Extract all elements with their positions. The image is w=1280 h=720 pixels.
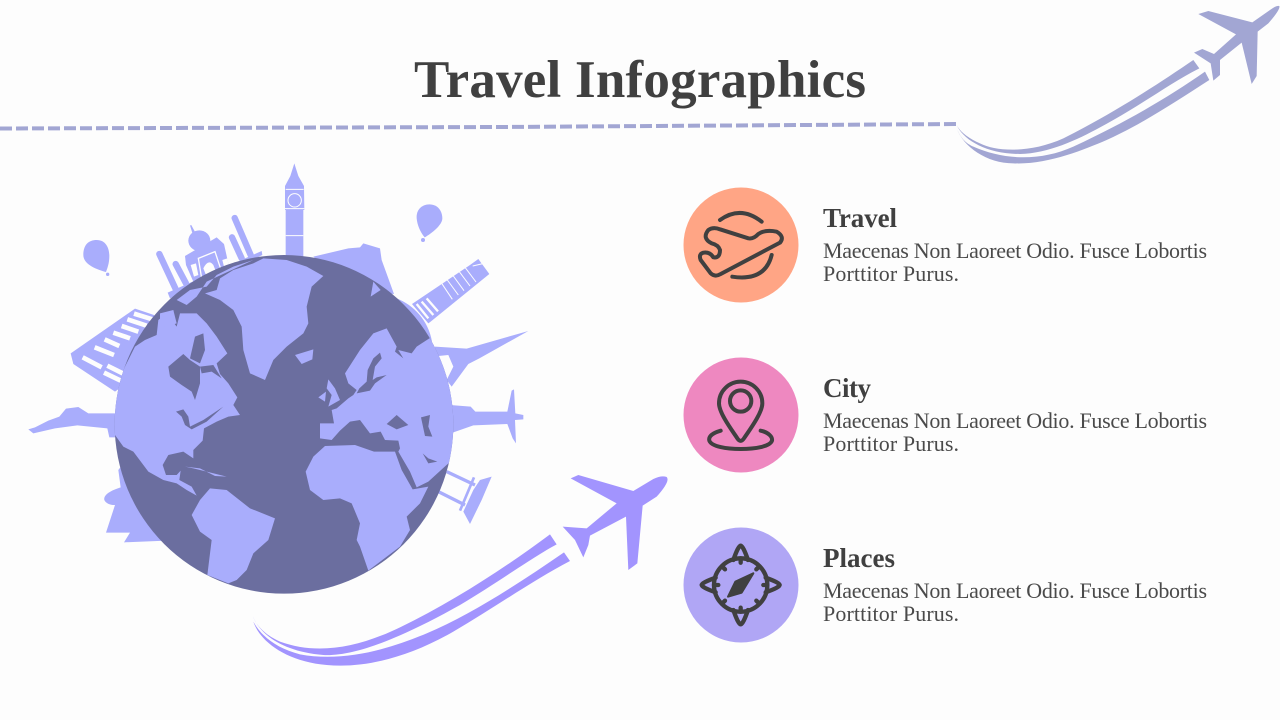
landmark: pyramids (104, 450, 167, 542)
North America (114, 313, 240, 496)
globe with world landmarks (28, 163, 528, 594)
landmark: Leaning Tower of Pisa (397, 259, 489, 342)
icon: airplane in orange circle (684, 188, 798, 302)
Africa (306, 445, 428, 571)
top airplane with contrails (957, 6, 1279, 163)
Foxe Basin (190, 333, 205, 363)
landmark: Parthenon (71, 309, 160, 392)
landmark: Eiffel Tower (433, 331, 528, 387)
South America (192, 488, 275, 583)
Black Sea (387, 415, 408, 429)
Persian Gulf (423, 453, 437, 463)
item: Travel (684, 188, 1207, 302)
heading: City: City (823, 373, 872, 403)
Great Lakes (176, 407, 223, 429)
title: Travel Infographics (414, 51, 866, 109)
dashed flight path line (0, 124, 957, 128)
Arctic islands (177, 260, 253, 305)
Hudson Strait (200, 365, 222, 378)
description: Places: Porttitor Purus. (823, 601, 959, 626)
icon: hot air balloon right (417, 204, 442, 242)
description: City (823, 408, 1207, 456)
landmark: Kremlin tower (313, 243, 394, 294)
landmarks silhouette ring (28, 163, 528, 542)
icon: map pin in pink circle (684, 358, 798, 472)
Ireland (318, 392, 326, 402)
description: City: Porttitor Purus. (823, 431, 959, 456)
description: Places: Maecenas Non Laoreet Odio. Fusce Lobortis (823, 578, 1207, 603)
icon: compass in lavender circle (684, 528, 798, 642)
Hudson Bay (168, 354, 200, 400)
landmark: Christ the Redeemer (450, 389, 523, 443)
landmark: Taj Mahal (159, 218, 262, 298)
description: Travel: Maecenas Non Laoreet Odio. Fusce Lobortis (823, 238, 1207, 263)
item: City (684, 358, 1207, 472)
Cuba and Caribbean (185, 467, 227, 477)
item: Places (684, 528, 1207, 642)
landmark: Statue of Liberty (28, 407, 118, 437)
Iceland (295, 349, 313, 364)
Eurasia (320, 328, 463, 487)
Greenland (205, 258, 323, 380)
UK (327, 379, 340, 407)
heading: Travel: Travel (823, 203, 897, 233)
Baltic (357, 353, 387, 393)
icon: hot air balloon left (83, 240, 109, 276)
globe continents (100, 258, 463, 583)
globe ocean (115, 255, 453, 594)
landmark: Big Ben (285, 163, 304, 260)
description: Places (823, 578, 1207, 626)
description: City: Maecenas Non Laoreet Odio. Fusce Lobortis (823, 408, 1207, 433)
landmark: Golden Gate bridge (438, 472, 492, 524)
bottom airplane with contrails (253, 475, 668, 666)
heading: Places: Places (823, 543, 895, 573)
Novaya Zemlya (371, 282, 381, 297)
description: Travel (823, 238, 1207, 286)
Caspian Sea (421, 415, 432, 437)
description: Travel: Porttitor Purus. (823, 261, 959, 286)
